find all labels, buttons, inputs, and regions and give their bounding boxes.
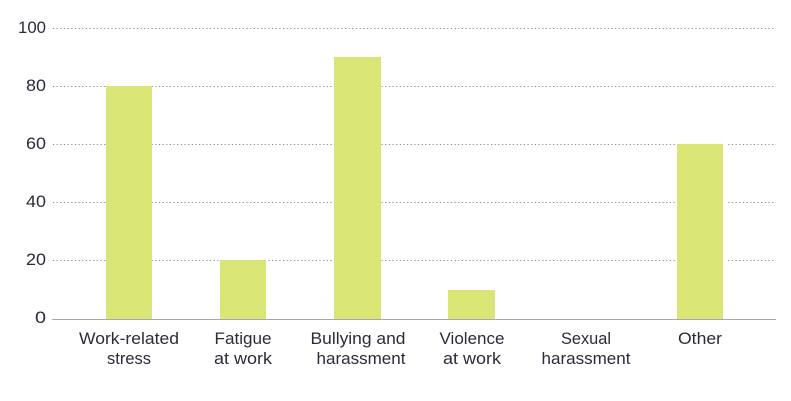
x-axis labels: Sexual: [561, 329, 611, 348]
x-axis labels: Work-related: [79, 329, 179, 348]
x-axis labels: at work: [214, 349, 273, 368]
x-axis labels: [79, 329, 722, 368]
x-axis labels: Fatigue: [214, 329, 272, 348]
x-axis labels: Other: [678, 329, 722, 348]
y-axis labels: 100: [18, 18, 46, 37]
y-axis labels: [18, 18, 46, 327]
y-axis labels: 60: [26, 134, 46, 153]
x-axis labels: Bullying and: [310, 329, 406, 348]
y-axis labels: 20: [26, 250, 46, 269]
y-axis labels: 80: [26, 76, 46, 95]
x-axis labels: Violence: [440, 329, 504, 348]
x-axis labels: harassment: [316, 349, 406, 368]
bars: [106, 57, 723, 319]
x-axis labels: stress: [107, 349, 151, 368]
y-axis labels: 0: [35, 308, 46, 327]
x-axis labels: harassment: [542, 349, 631, 368]
x-axis labels: at work: [443, 349, 502, 368]
y-axis labels: 40: [26, 192, 46, 211]
